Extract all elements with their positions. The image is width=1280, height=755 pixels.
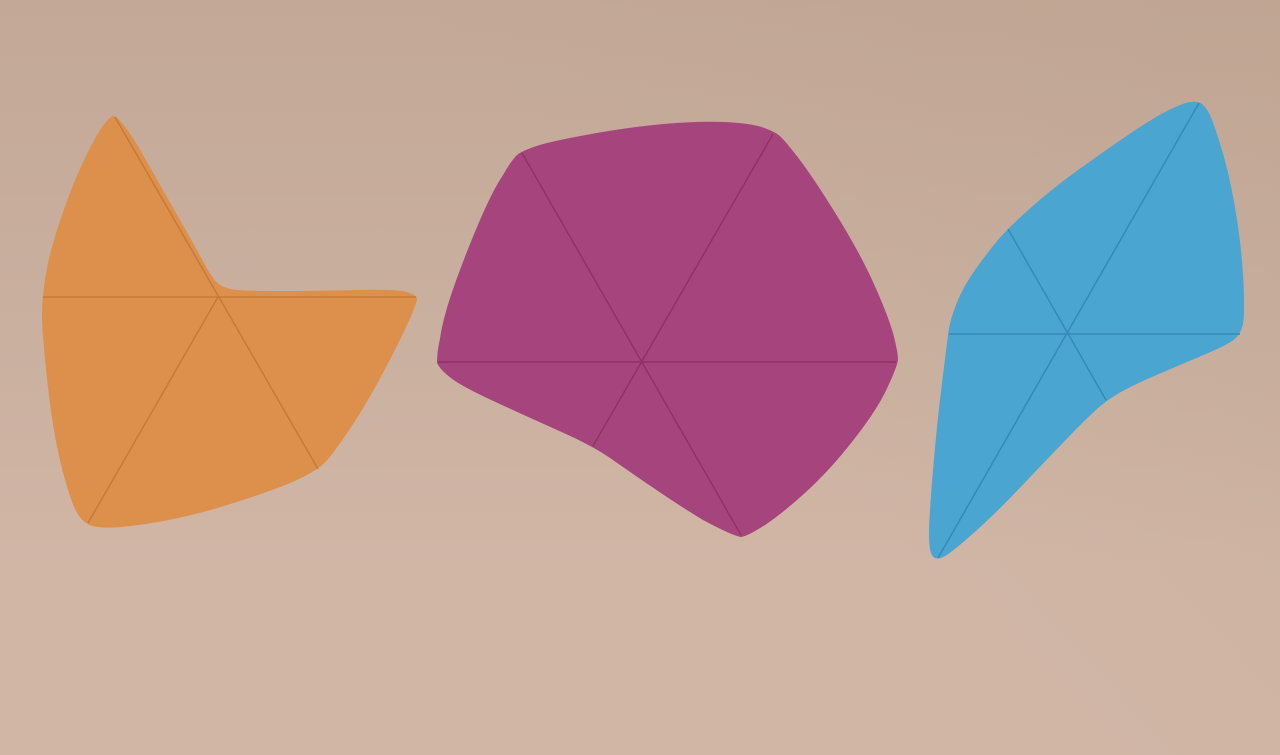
radar shape: orange [42,116,417,528]
radar shape: blue [929,102,1244,559]
radar shape: magenta [437,122,898,537]
